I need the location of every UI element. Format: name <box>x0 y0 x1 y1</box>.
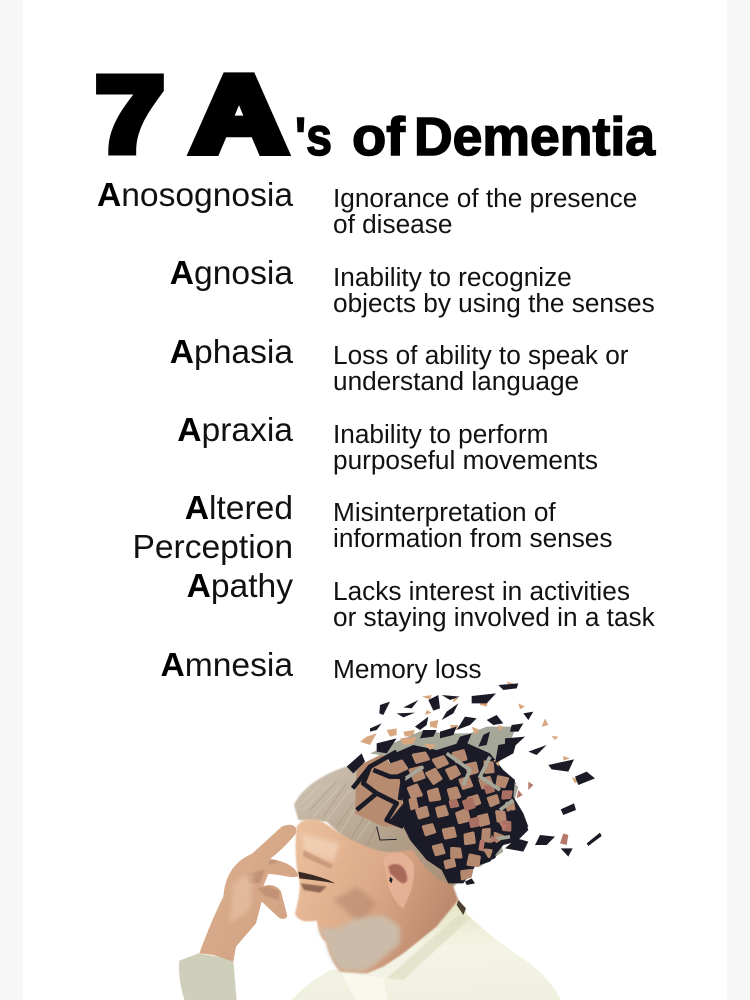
term: Altered Perception: Altered <box>185 490 293 527</box>
face and neck <box>295 819 458 973</box>
title: Dementia <box>414 107 656 167</box>
definition: Anosognosia: Ignorance of the presence <box>333 183 637 213</box>
dark fragments <box>347 683 602 885</box>
definition: Apraxia <box>333 419 598 475</box>
definition: Altered Perception: information from senses <box>333 523 612 553</box>
term: Amnesia: Amnesia <box>160 647 293 684</box>
title: of <box>352 107 406 167</box>
definition: Aphasia <box>333 340 628 396</box>
shirt cuff <box>179 953 237 1000</box>
definition: Agnosia: objects by using the senses <box>333 288 655 318</box>
term: Altered Perception <box>132 490 293 566</box>
definition: Amnesia: Memory loss <box>333 654 481 684</box>
definition: Anosognosia <box>333 183 637 239</box>
cracks and fragment lattice <box>353 752 403 827</box>
grey strips across fragments <box>403 753 513 840</box>
title: A <box>192 54 286 174</box>
beard <box>318 915 400 972</box>
term: Aphasia: Aphasia <box>170 334 293 371</box>
title: 7 <box>96 56 164 174</box>
definition: Apathy <box>333 576 655 632</box>
term: Altered Perception: Perception <box>132 529 293 566</box>
hair fragments (exposed scalp) <box>355 753 410 827</box>
definition: Aphasia: Loss of ability to speak or <box>333 340 628 370</box>
grey fragments <box>370 727 518 867</box>
definition: Anosognosia: of disease <box>333 209 452 239</box>
ear <box>383 852 414 908</box>
definition: Apathy: or staying involved in a task <box>333 602 655 632</box>
definition: Altered Perception <box>333 497 612 553</box>
title: 's <box>295 107 332 167</box>
term: Apathy: Apathy <box>187 568 293 605</box>
hair <box>294 765 457 900</box>
dark fragment mass <box>387 742 528 883</box>
title <box>96 54 656 174</box>
definition: Aphasia: understand language <box>333 366 579 396</box>
hand and forearm <box>199 825 298 962</box>
tan shards over dark mass <box>390 751 514 879</box>
definition: Agnosia <box>333 262 655 318</box>
term: Anosognosia: Anosognosia <box>97 177 293 214</box>
definition: Apraxia: purposeful movements <box>333 445 598 475</box>
definition: Agnosia: Inability to recognize <box>333 262 572 292</box>
term: Agnosia: Agnosia <box>170 255 293 292</box>
shirt and collar <box>290 898 562 1000</box>
definition: Apraxia: Inability to perform <box>333 419 548 449</box>
definition: Apathy: Lacks interest in activities <box>333 576 630 606</box>
term: Apraxia: Apraxia <box>177 412 293 449</box>
tan shards on fringe <box>360 682 580 783</box>
definition: Altered Perception: Misinterpretation of <box>333 497 556 527</box>
